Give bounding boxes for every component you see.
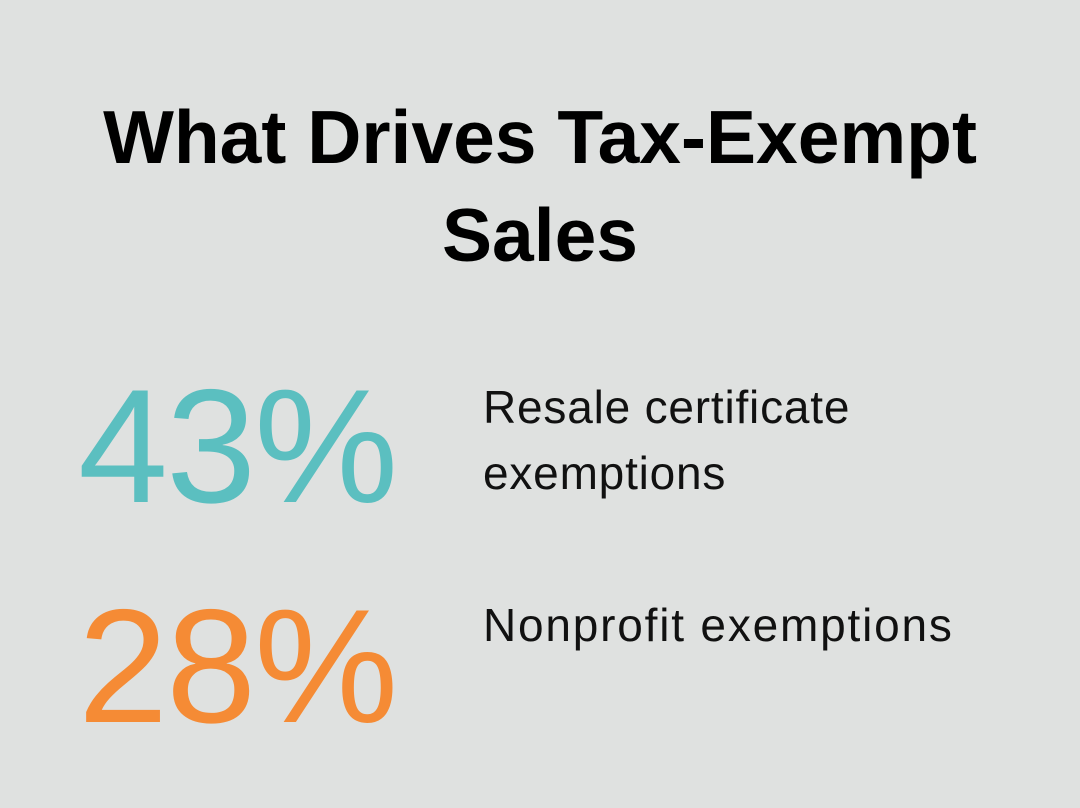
stat: 43% xyxy=(78,356,850,537)
title: Sales xyxy=(442,193,638,277)
label: resale certificate exemptions: exemptions xyxy=(483,447,726,499)
label: resale certificate exemptions xyxy=(483,381,850,499)
number 28%: 28% xyxy=(78,576,396,757)
label: nonprofit exemptions: Nonprofit exemptions xyxy=(483,599,954,651)
number 43%: 43% xyxy=(78,356,396,537)
title: What Drives Tax-Exempt xyxy=(103,95,977,179)
title xyxy=(103,95,977,277)
stat: 28% xyxy=(78,576,954,757)
label: resale certificate exemptions: Resale certificate xyxy=(483,381,850,433)
